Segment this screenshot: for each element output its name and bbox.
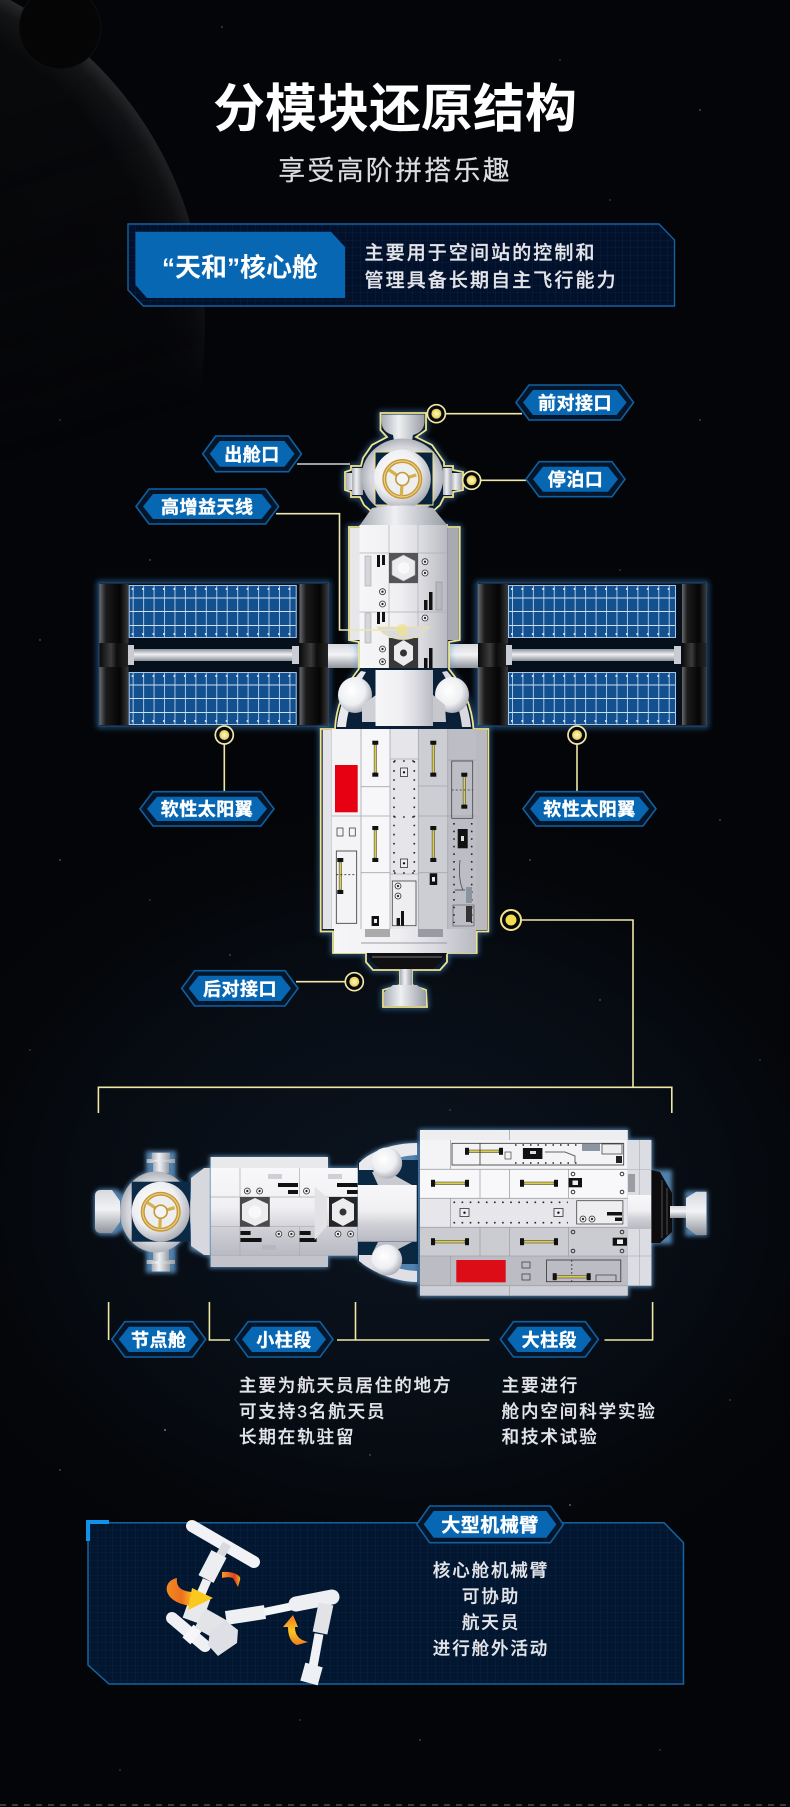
callout: berthing port: 停泊口: [548, 469, 603, 490]
small cylinder segment: [211, 1157, 358, 1267]
solar wing: left: [99, 583, 359, 726]
text: small cylinder description: 长期在轨驻留: [239, 1427, 355, 1447]
robotic arm description: [433, 1560, 549, 1658]
node sphere: [346, 438, 462, 525]
callout: forward docking port: 前对接口: [538, 394, 612, 414]
robotic arm description: 可协助: [462, 1586, 520, 1606]
core module description: 主要用于空间站的控制和: [364, 242, 597, 264]
label: small cylinder segment: 小柱段: [256, 1329, 312, 1350]
large cylinder segment: [420, 1130, 651, 1296]
label: large cylinder segment: 大柱段: [522, 1329, 577, 1350]
core module name badge: “天和”核心舱: [162, 252, 318, 282]
rotation arrow: large: [167, 1578, 213, 1610]
text: large cylinder description: 舱内空间科学实验: [502, 1402, 657, 1422]
aft skirt and docking port: [334, 929, 476, 1006]
transition section: [337, 670, 471, 727]
robotic arm description: 航天员: [462, 1612, 520, 1632]
arm base block: [208, 1620, 238, 1656]
callout: flexible solar wing right: 软性太阳翼: [543, 800, 636, 820]
core module name badge: [136, 232, 345, 298]
large cylinder segment: [323, 729, 487, 930]
title: 分模块还原结构: [213, 81, 577, 139]
section connector lines: [109, 1302, 653, 1340]
callout: high gain antenna: 高增益天线: [161, 496, 254, 517]
label: small cylinder segment: [235, 1322, 333, 1357]
callout: forward docking port: [427, 385, 634, 423]
text: small cylinder description: 可支持3名航天员: [239, 1402, 386, 1422]
rotation arrow: small top: [222, 1572, 240, 1587]
core module description: [364, 242, 618, 291]
robotic arm description: 核心舱机械臂: [433, 1560, 549, 1580]
antenna dot: [396, 624, 408, 636]
robotic arm description: 进行舱外活动: [433, 1638, 549, 1658]
callout: aft docking port: [182, 971, 363, 1006]
label: node module: [112, 1322, 206, 1357]
callout: berthing port: [463, 462, 625, 497]
callout: high gain antenna: [136, 489, 397, 630]
subtitle: 享受高阶拼搭乐趣: [278, 156, 512, 186]
core module description: 管理具备长期自主飞行能力: [364, 269, 618, 291]
transition section: [358, 1143, 418, 1282]
corner bracket: [88, 1522, 109, 1541]
solar wing: right: [449, 583, 706, 726]
forward docking cup: [382, 414, 424, 441]
callout: exit hatch: 出舱口: [224, 444, 280, 465]
space station: horizontal side view: [94, 1129, 708, 1297]
text: small cylinder description: 主要为航天员居住的地方: [239, 1376, 452, 1396]
flag: red panel: [456, 1260, 506, 1282]
callout: exit hatch: [203, 436, 350, 472]
space station: vertical top view: [321, 413, 488, 1007]
node module: [95, 1153, 210, 1272]
aft docking port: [651, 1170, 706, 1243]
text: large cylinder description: [502, 1376, 657, 1447]
robotic arm illustration: [172, 1526, 332, 1683]
text: large cylinder description: 和技术试验: [502, 1427, 599, 1447]
label: large cylinder segment: [500, 1322, 598, 1357]
callout: aft docking port: 后对接口: [203, 979, 277, 999]
background: large moon: [0, 0, 205, 332]
panel: robotic arm: [88, 1506, 684, 1684]
text: small cylinder description: [239, 1376, 452, 1447]
robotic arm label: 大型机械臂: [441, 1513, 539, 1536]
callout: flexible solar wing left: [140, 726, 274, 826]
robotic arm label: [417, 1506, 563, 1543]
text: large cylinder description: 主要进行: [502, 1376, 579, 1396]
label: node module: 节点舱: [131, 1329, 187, 1350]
rotation arrow: elbow: [283, 1615, 308, 1645]
small cylinder segment: [350, 525, 459, 668]
callout: flexible solar wing left: 软性太阳翼: [161, 800, 253, 820]
panel: core module intro: [128, 224, 674, 306]
flag: red panel: [335, 765, 358, 812]
background: small dark moon: [19, 0, 101, 69]
callout connector: detail bracket: [98, 910, 672, 1113]
callout: flexible solar wing right: [523, 726, 656, 826]
